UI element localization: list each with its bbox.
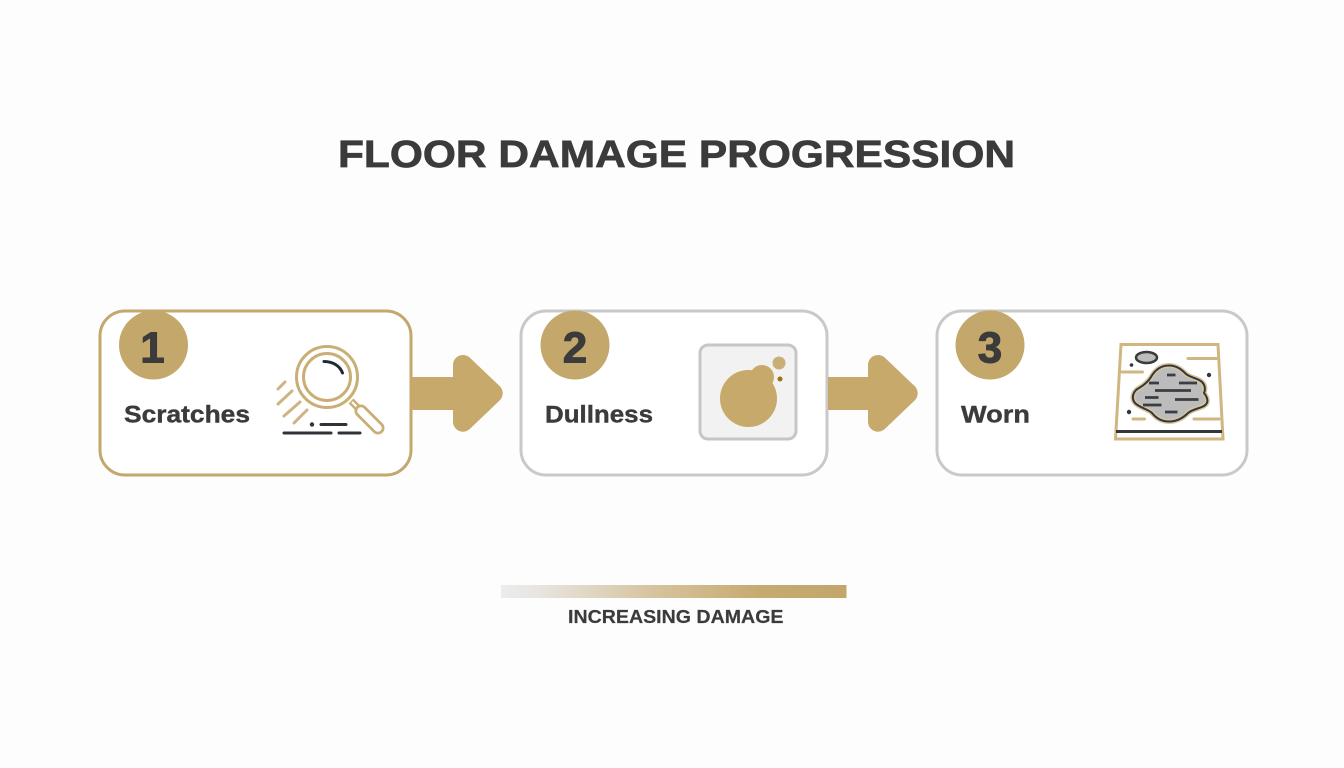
card outline (521, 311, 827, 475)
card outline (100, 311, 411, 475)
card outline (937, 311, 1247, 475)
label: dullness: Dullness (545, 402, 653, 428)
number badge 1: 1 (140, 324, 165, 372)
number badge 3: 3 (978, 324, 1002, 372)
number badge 2: 2 (563, 324, 587, 372)
icon: magnifying glass over scratches (278, 346, 378, 433)
number badge 1 (119, 310, 188, 380)
label: worn: Worn (961, 402, 1030, 428)
icon: worn floor patch (1116, 344, 1223, 439)
number badge 3 (956, 310, 1024, 380)
icon: dull spot on tile (700, 345, 796, 439)
damage gradient bar (501, 585, 846, 598)
arrow: step 2 to step 3 (828, 365, 908, 422)
caption: increasing damage: INCREASING DAMAGE (568, 607, 784, 627)
panel: step 2 dullness (521, 310, 827, 475)
panel: step 3 worn (937, 310, 1247, 475)
arrow: step 1 to step 2 (411, 365, 493, 422)
panel: step 1 scratches (100, 310, 411, 475)
title: FLOOR DAMAGE PROGRESSION (338, 134, 1015, 176)
label: scratches: Scratches (124, 402, 250, 428)
number badge 2 (540, 310, 610, 380)
